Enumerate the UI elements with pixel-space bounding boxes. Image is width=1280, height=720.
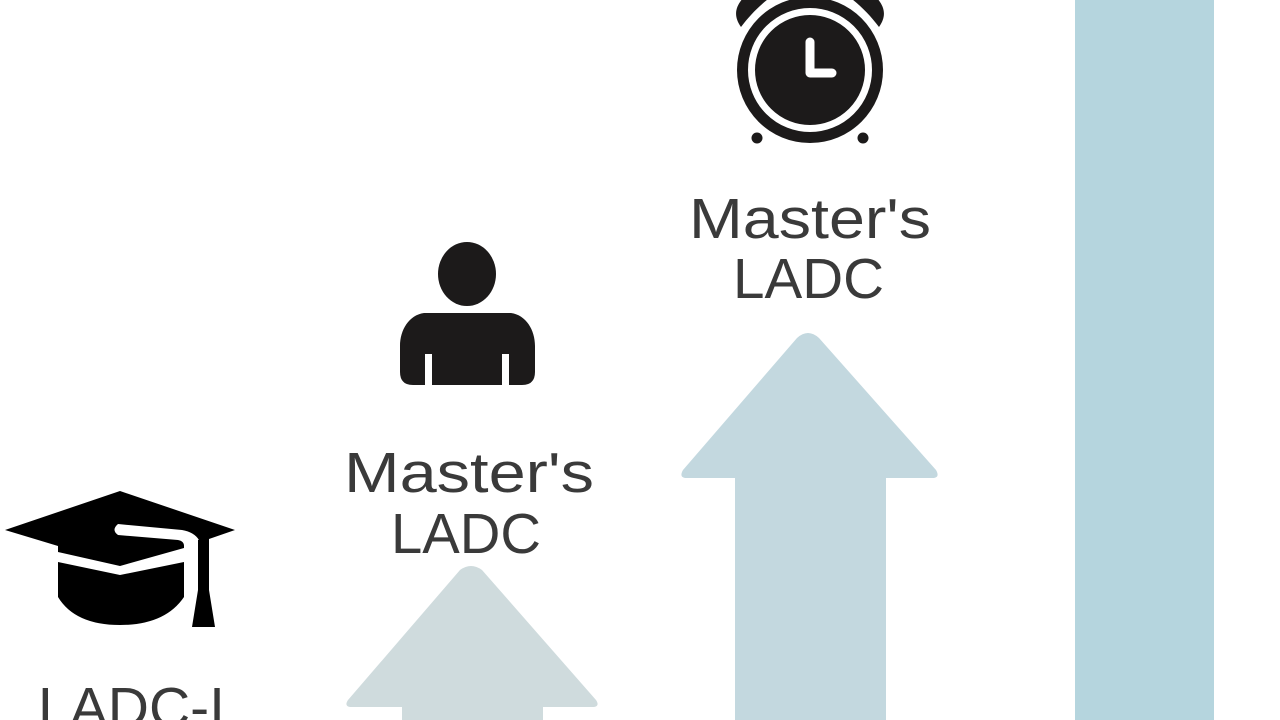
icon: alarm clock xyxy=(733,0,887,147)
arrow: grey up arrow xyxy=(346,566,598,720)
arrow: blue-grey up arrow xyxy=(681,333,938,720)
label: Master's LADC: LADC xyxy=(733,247,884,311)
step 2: Master's LADC xyxy=(344,242,598,720)
icon: graduation cap xyxy=(5,491,235,627)
label: Master's LADC xyxy=(689,187,931,311)
label: Master's LADC: Master's xyxy=(344,441,594,505)
bar: tall blue column xyxy=(1075,0,1214,720)
step 1: LADC-I xyxy=(5,491,235,720)
label: Master's LADC: LADC xyxy=(391,502,541,566)
label: Master's LADC: Master's xyxy=(689,187,931,251)
icon: person xyxy=(400,242,535,385)
step 3: Master's LADC xyxy=(681,0,938,720)
label: Master's LADC xyxy=(344,441,594,566)
